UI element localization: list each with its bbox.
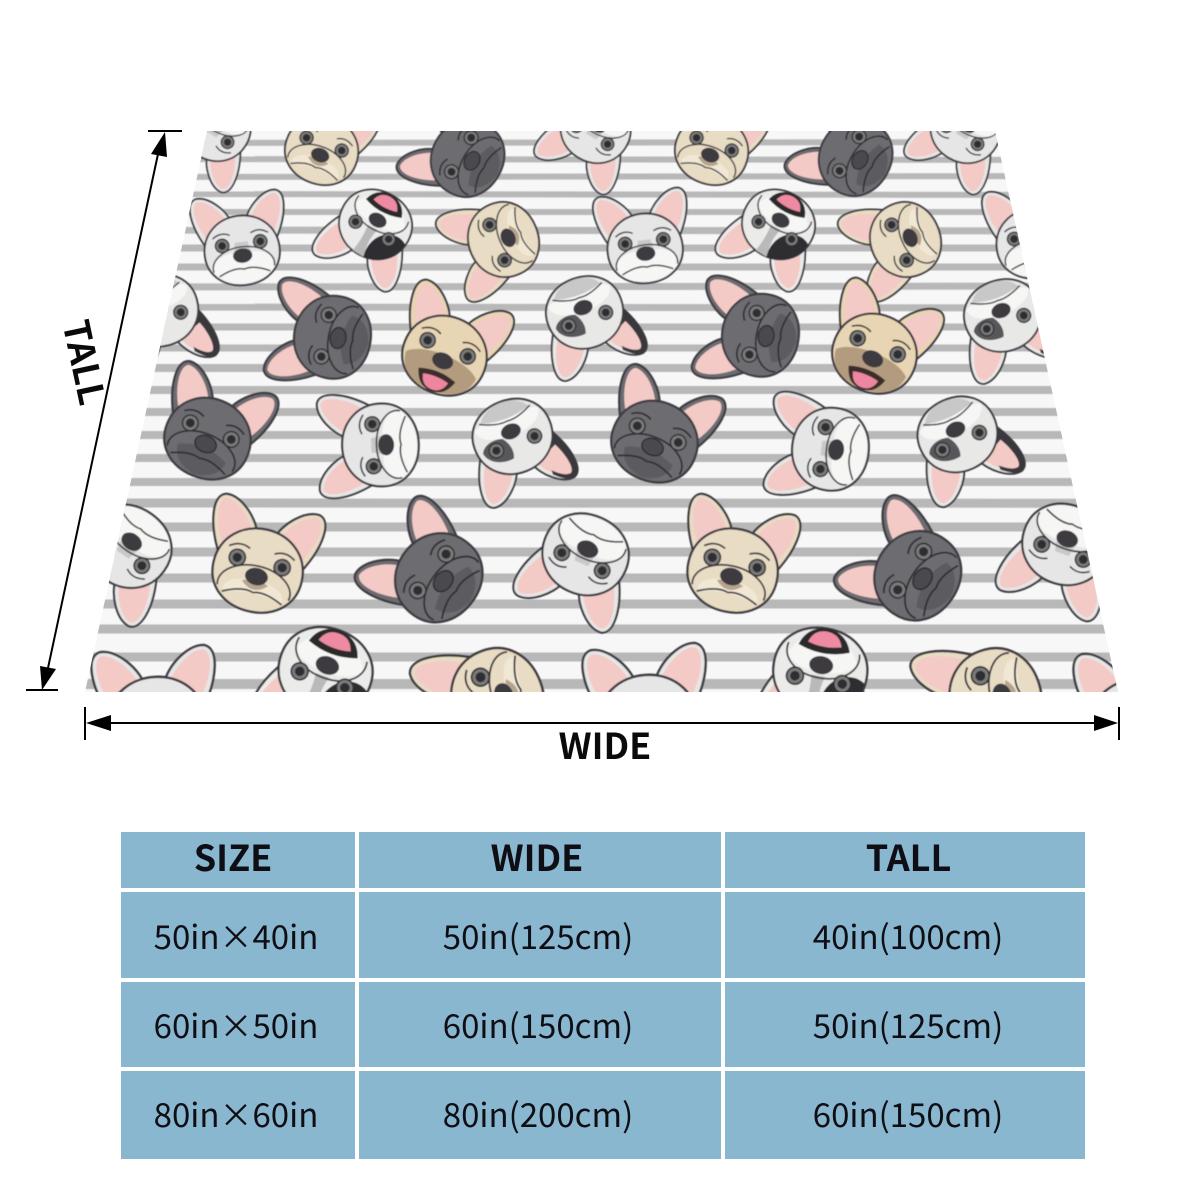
row 1 size: 50in×40in [154,910,318,958]
header: size: SIZE [194,830,272,882]
row 1 wide: 50in(125cm) [443,910,633,958]
row 5 dogs [108,492,1100,635]
row 2 size [121,982,355,1067]
row 6 dogs [90,625,1118,692]
row 1 wide [359,892,721,978]
blanket [86,131,1118,692]
row 2 wide [359,982,721,1067]
row 3 tall: 60in(150cm) [813,1088,1003,1136]
row 3 size [121,1071,355,1159]
row 1 dogs [201,131,998,199]
size table [121,830,1085,1159]
wide label: WIDE [559,718,651,770]
row 3 dogs [158,274,1045,398]
row 2 wide: 60in(150cm) [443,1000,633,1048]
header: wide: WIDE [491,830,583,882]
row 3 wide [359,1071,721,1159]
header: wide [359,832,721,888]
row 4 dogs [143,358,1028,511]
header: tall: TALL [866,830,951,882]
header: size [121,832,355,888]
grey stripes [60,142,1150,685]
row 2 tall: 50in(125cm) [813,1000,1003,1048]
row 1 size [121,892,355,978]
tall dimension arrow [26,131,182,690]
row 3 tall [725,1071,1085,1159]
row 2 dogs [188,186,1028,304]
wide dimension arrow [85,707,1119,740]
row 1 tall: 40in(100cm) [813,910,1003,958]
row 3 size: 80in×60in [154,1088,318,1136]
row 2 tall [725,982,1085,1067]
tall label: TALL [52,315,120,409]
header: tall [725,832,1085,888]
row 2 size: 60in×50in [154,1000,318,1048]
row 1 tall [725,892,1085,978]
row 3 wide: 80in(200cm) [443,1088,633,1136]
